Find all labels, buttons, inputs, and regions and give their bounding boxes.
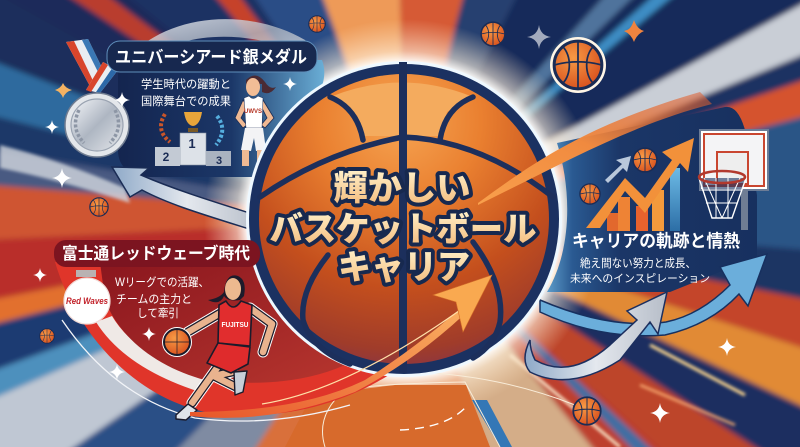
orange trail upper right	[478, 92, 712, 205]
heading: red panel: 富士通レッドウェーブ時代	[62, 243, 250, 263]
heading: red panel	[54, 240, 260, 267]
panel text line 3: して牽引	[137, 306, 179, 320]
panel text line 2: 国際舞台での成果	[141, 94, 231, 108]
logo	[64, 270, 110, 324]
panel body	[547, 107, 757, 292]
medal ribbon	[66, 39, 118, 93]
white stripe	[96, 316, 205, 392]
chart: bars	[607, 168, 680, 231]
player in white uniform	[235, 75, 276, 166]
panel heading	[107, 41, 317, 72]
panel text line 2: 未来へのインスピレーション	[570, 272, 710, 285]
silver swoosh top-left	[128, 19, 318, 62]
title: キャリア	[338, 249, 470, 287]
title	[270, 170, 536, 287]
silver arrow	[525, 292, 667, 380]
court floor	[285, 372, 575, 447]
balls: decorative	[40, 16, 606, 425]
blue arrow	[540, 254, 767, 336]
title: バスケットボール	[270, 211, 536, 249]
panel: red wave	[55, 262, 400, 421]
panel text line 2: チームの主力と	[116, 293, 192, 306]
icon: podium and trophy	[155, 112, 231, 167]
logo: Red Waves	[66, 296, 108, 306]
panel text: 絶え間ない努力と成長、	[580, 256, 696, 270]
panel: silver medal	[65, 39, 324, 177]
icon: podium and trophy: 1	[188, 136, 196, 151]
main ball glow	[204, 19, 604, 419]
red band	[55, 262, 400, 415]
panel text: 学生時代の躍動と	[141, 77, 231, 91]
player in white uniform: UWVS	[244, 109, 262, 115]
red panel body	[100, 262, 345, 383]
icon: chart ball top	[633, 148, 657, 172]
panel text: Wリーグでの活躍、	[115, 275, 209, 289]
icon: podium and trophy: 2	[163, 150, 170, 164]
title: 輝かしい	[334, 170, 470, 208]
icon: silver medal	[65, 92, 130, 157]
panel heading: ユニバーシアード銀メダル	[115, 47, 307, 67]
thin white line	[62, 320, 350, 421]
icon: podium and trophy: 3	[216, 155, 222, 167]
icon: basketball hoop	[699, 130, 768, 230]
player in red uniform	[162, 275, 272, 420]
sparkles	[33, 20, 736, 423]
player in red uniform: FUJITSU	[222, 320, 248, 329]
panel heading: キャリアの軌跡と情熱	[572, 231, 740, 251]
top cap panel	[330, 82, 473, 136]
chart: rising arrow	[586, 138, 694, 228]
panel body	[118, 60, 324, 177]
icon: chart ball lower	[580, 184, 600, 204]
icon: small arrow	[605, 156, 631, 183]
arrow: orange trail through ball	[190, 275, 492, 418]
panel: career trajectory	[525, 107, 768, 380]
ball: main	[246, 61, 562, 377]
arrow: silver left	[0, 145, 262, 233]
